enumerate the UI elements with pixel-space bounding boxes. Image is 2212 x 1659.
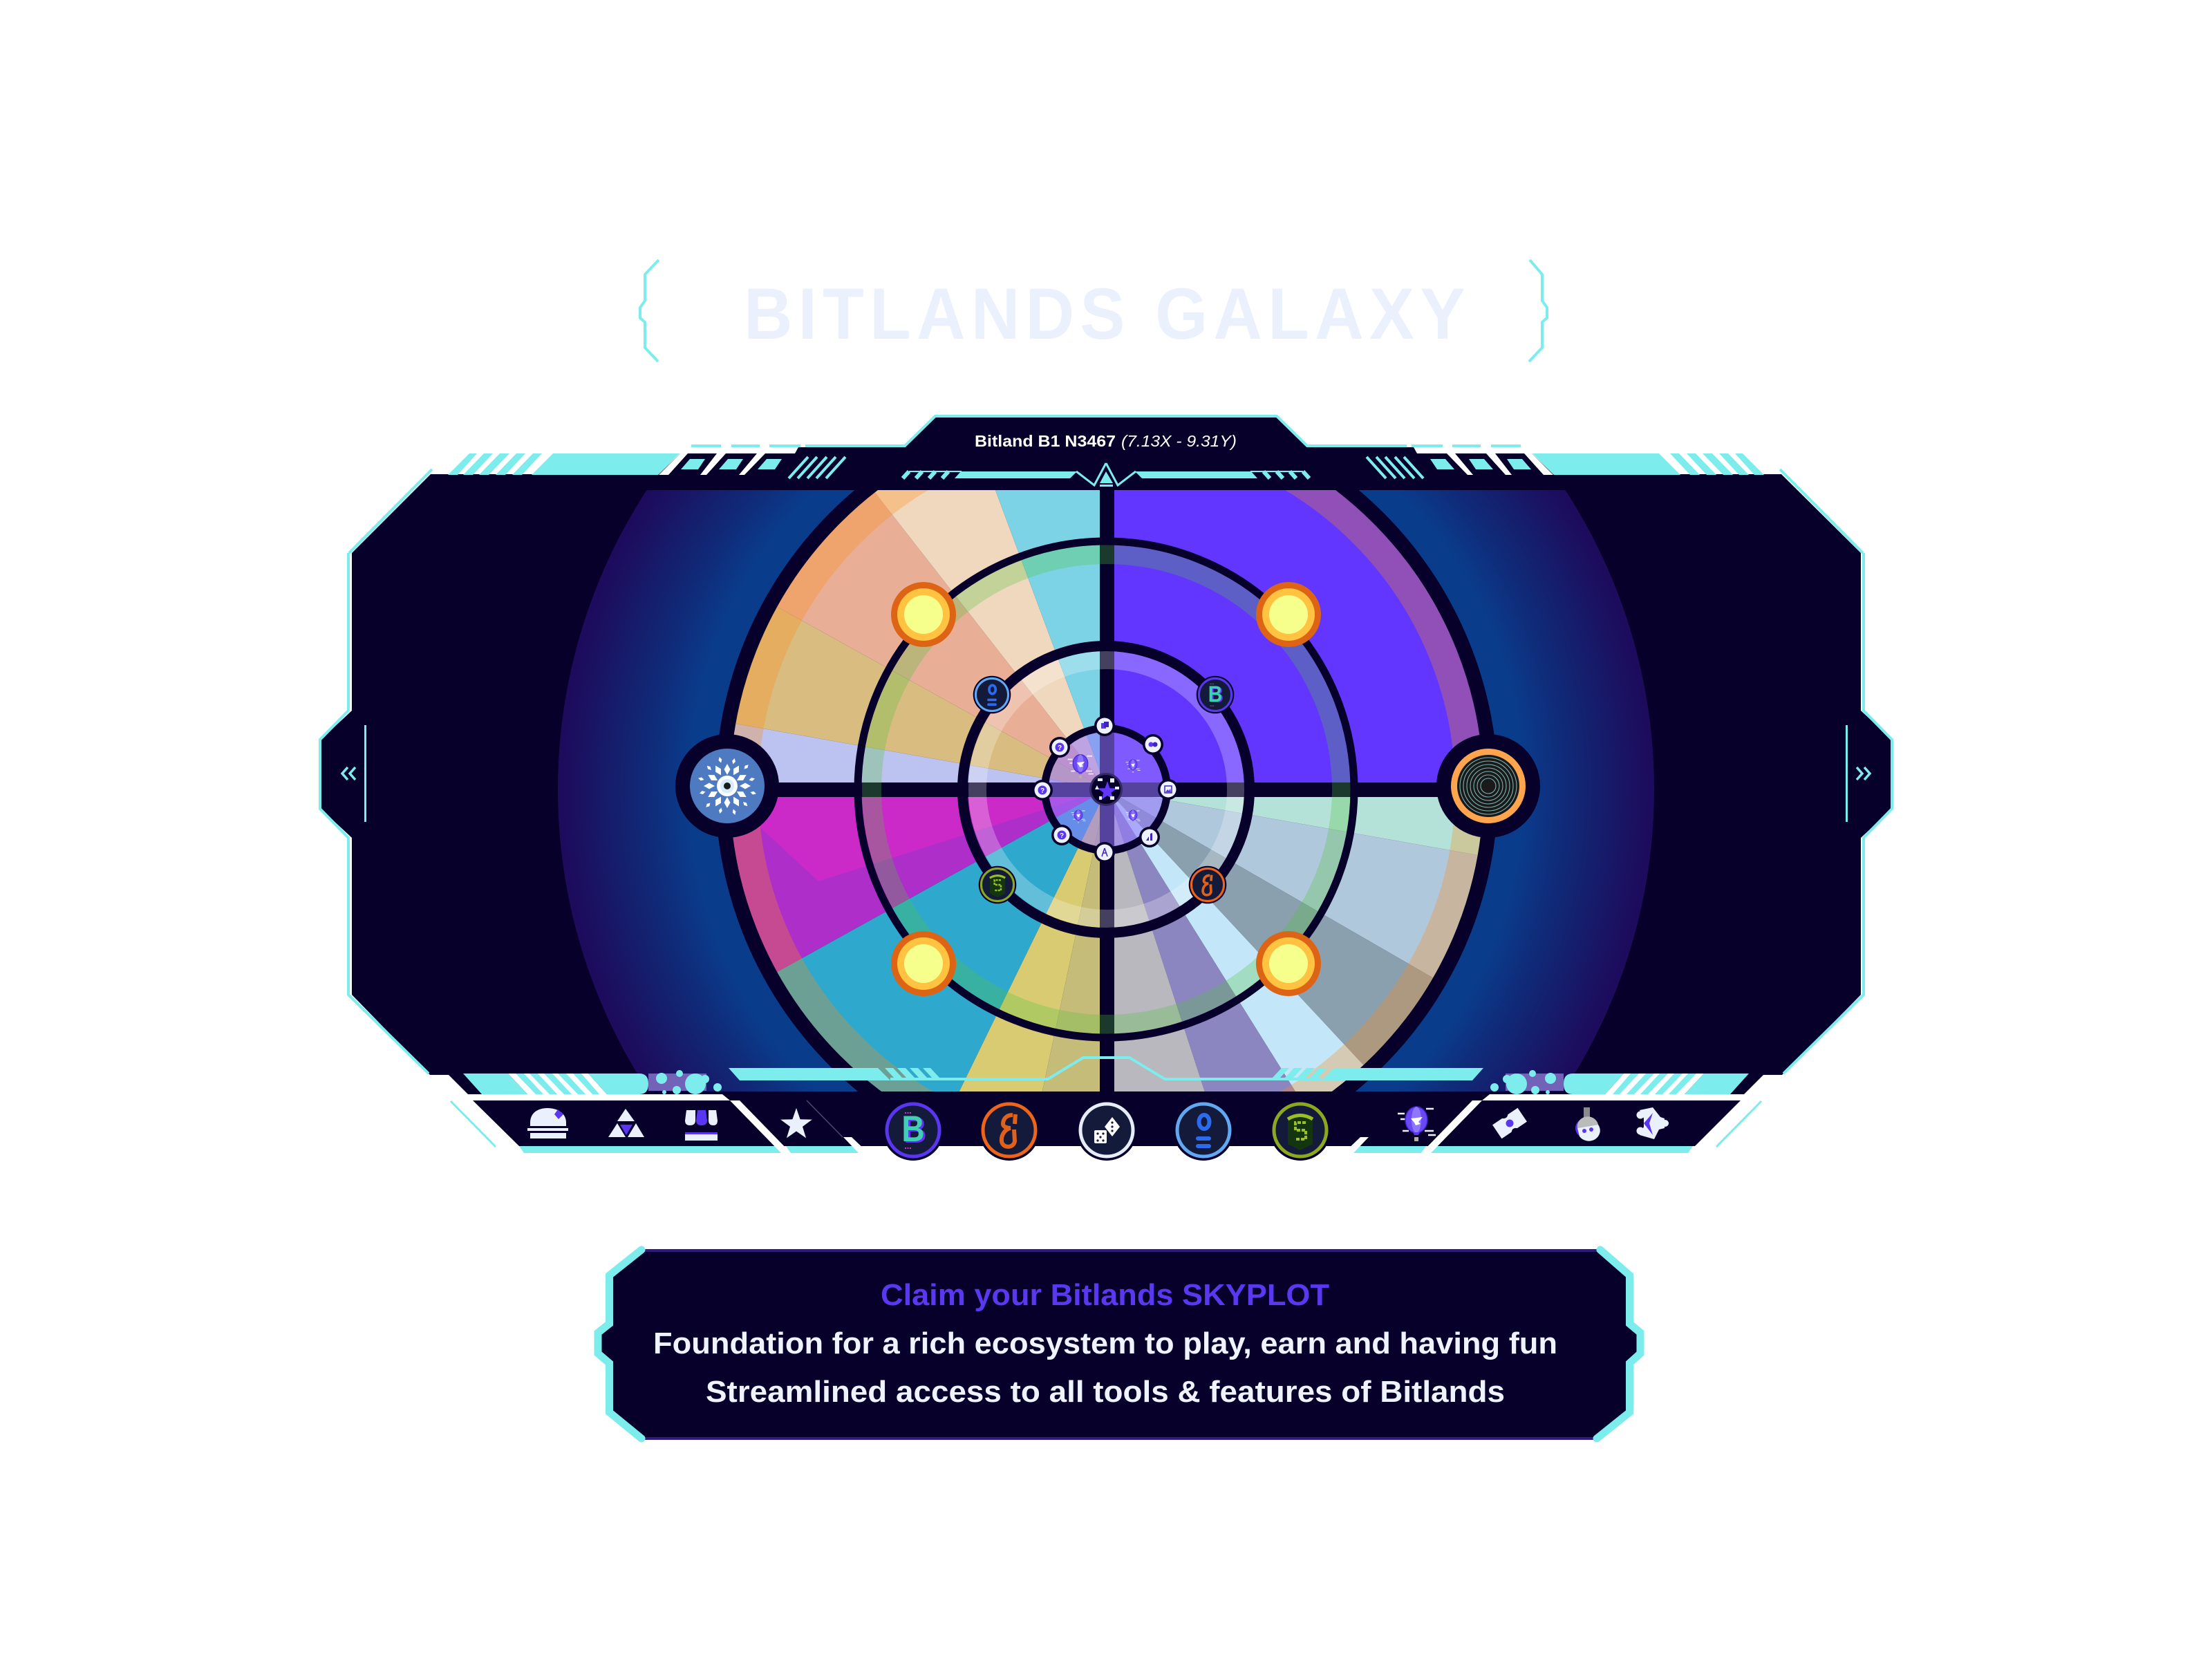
balloon small bottom left: [1071, 810, 1086, 823]
panel: toolbar left dark: [473, 1100, 777, 1146]
ring nodes: [1032, 715, 1179, 863]
frame decoration left top: [320, 416, 1106, 1074]
node bottom: [1094, 842, 1115, 863]
callout top and bottom rules: [641, 1250, 1600, 1438]
icon: triangles: [608, 1109, 644, 1137]
sun bottom left: [891, 931, 956, 996]
token S on ring: [979, 866, 1016, 903]
balloon small top right: [1126, 760, 1141, 773]
node left: ?: [1040, 787, 1044, 795]
second ring: [962, 646, 1250, 933]
right planet black hole: [1436, 734, 1540, 838]
chart: galaxy sky wheel: [558, 490, 1654, 1091]
title bracket right: [1529, 260, 1547, 362]
sun top left: [891, 582, 956, 647]
node bottom right: [1139, 827, 1160, 847]
inner ring: [1045, 729, 1167, 850]
balloon small bottom right: [1126, 810, 1141, 823]
frame decoration right top: [1106, 416, 1892, 1074]
icon: observatory: [527, 1108, 568, 1138]
inner band overlay: [977, 660, 1236, 919]
icon: ticket: [1492, 1108, 1527, 1138]
token B on ring: [1197, 676, 1234, 713]
icon: shop: [685, 1110, 718, 1141]
icon: flask: [1575, 1107, 1600, 1141]
sun bottom right: [1256, 931, 1321, 996]
title bracket left: [640, 260, 659, 362]
frame decoration left bottom: [451, 1068, 940, 1153]
wheel background ring: [718, 490, 1495, 1091]
left planet snowflake: [675, 734, 779, 838]
token coin B: [883, 1100, 944, 1161]
token coin J: [979, 1100, 1040, 1161]
node top left: [1049, 737, 1070, 758]
title bar label: [975, 432, 1237, 450]
glow halo: [558, 490, 1654, 1091]
callout line 1: Foundation for a rich ecosystem to play, earn and having fun: [653, 1327, 1557, 1360]
inner disc overlay: [1049, 731, 1165, 847]
node top left: ?: [1058, 744, 1062, 752]
token coin dice: [1076, 1100, 1137, 1161]
node left: [1032, 780, 1053, 800]
node bottom left: [1051, 825, 1072, 845]
callout right bracket: [1597, 1250, 1640, 1438]
title bar label: Bitland B1 N3467: [975, 432, 1116, 450]
node right: [1158, 779, 1179, 800]
callout line 2: Streamlined access to all tools & features of Bitlands: [706, 1375, 1505, 1409]
title bar label: (7.13X - 9.31Y): [1121, 432, 1237, 450]
title: BITLANDS GALAXY: [744, 274, 1465, 355]
center bottom circuit line: [890, 1058, 1322, 1079]
callout heading: Claim your Bitlands SKYPLOT: [881, 1278, 1329, 1312]
token coin S: [1270, 1100, 1331, 1161]
node bottom left: ?: [1060, 832, 1064, 840]
cross bars: [1100, 490, 1114, 1091]
center hub star: [1089, 773, 1123, 806]
sun top right: [1256, 582, 1321, 647]
panel: toolbar right dark: [1436, 1100, 1741, 1146]
outer ring: [718, 490, 1495, 1091]
callout background: [598, 1250, 1640, 1439]
middle ring: [858, 541, 1354, 1038]
wheel sectors: [733, 490, 1481, 1091]
callout panel: [598, 1250, 1640, 1439]
icon: puzzle: [1637, 1107, 1669, 1139]
middle band overlay: [872, 554, 1342, 1024]
node top: [1094, 715, 1115, 736]
frame decoration right bottom: [1272, 1068, 1761, 1153]
token O on ring: [973, 676, 1011, 713]
node top right: [1143, 734, 1163, 755]
icon: star: [780, 1108, 812, 1138]
token coin O: [1173, 1100, 1234, 1161]
slim divider line: [807, 1100, 843, 1137]
center top triangle marker: [1100, 471, 1113, 487]
token J on ring: [1189, 866, 1226, 903]
outer band overlay: [733, 490, 1481, 1091]
panel: dark console frame: [321, 418, 1892, 1146]
icon: balloon toolbar: [1398, 1107, 1436, 1141]
callout left bracket: [598, 1250, 641, 1438]
balloon large: [1068, 755, 1094, 778]
